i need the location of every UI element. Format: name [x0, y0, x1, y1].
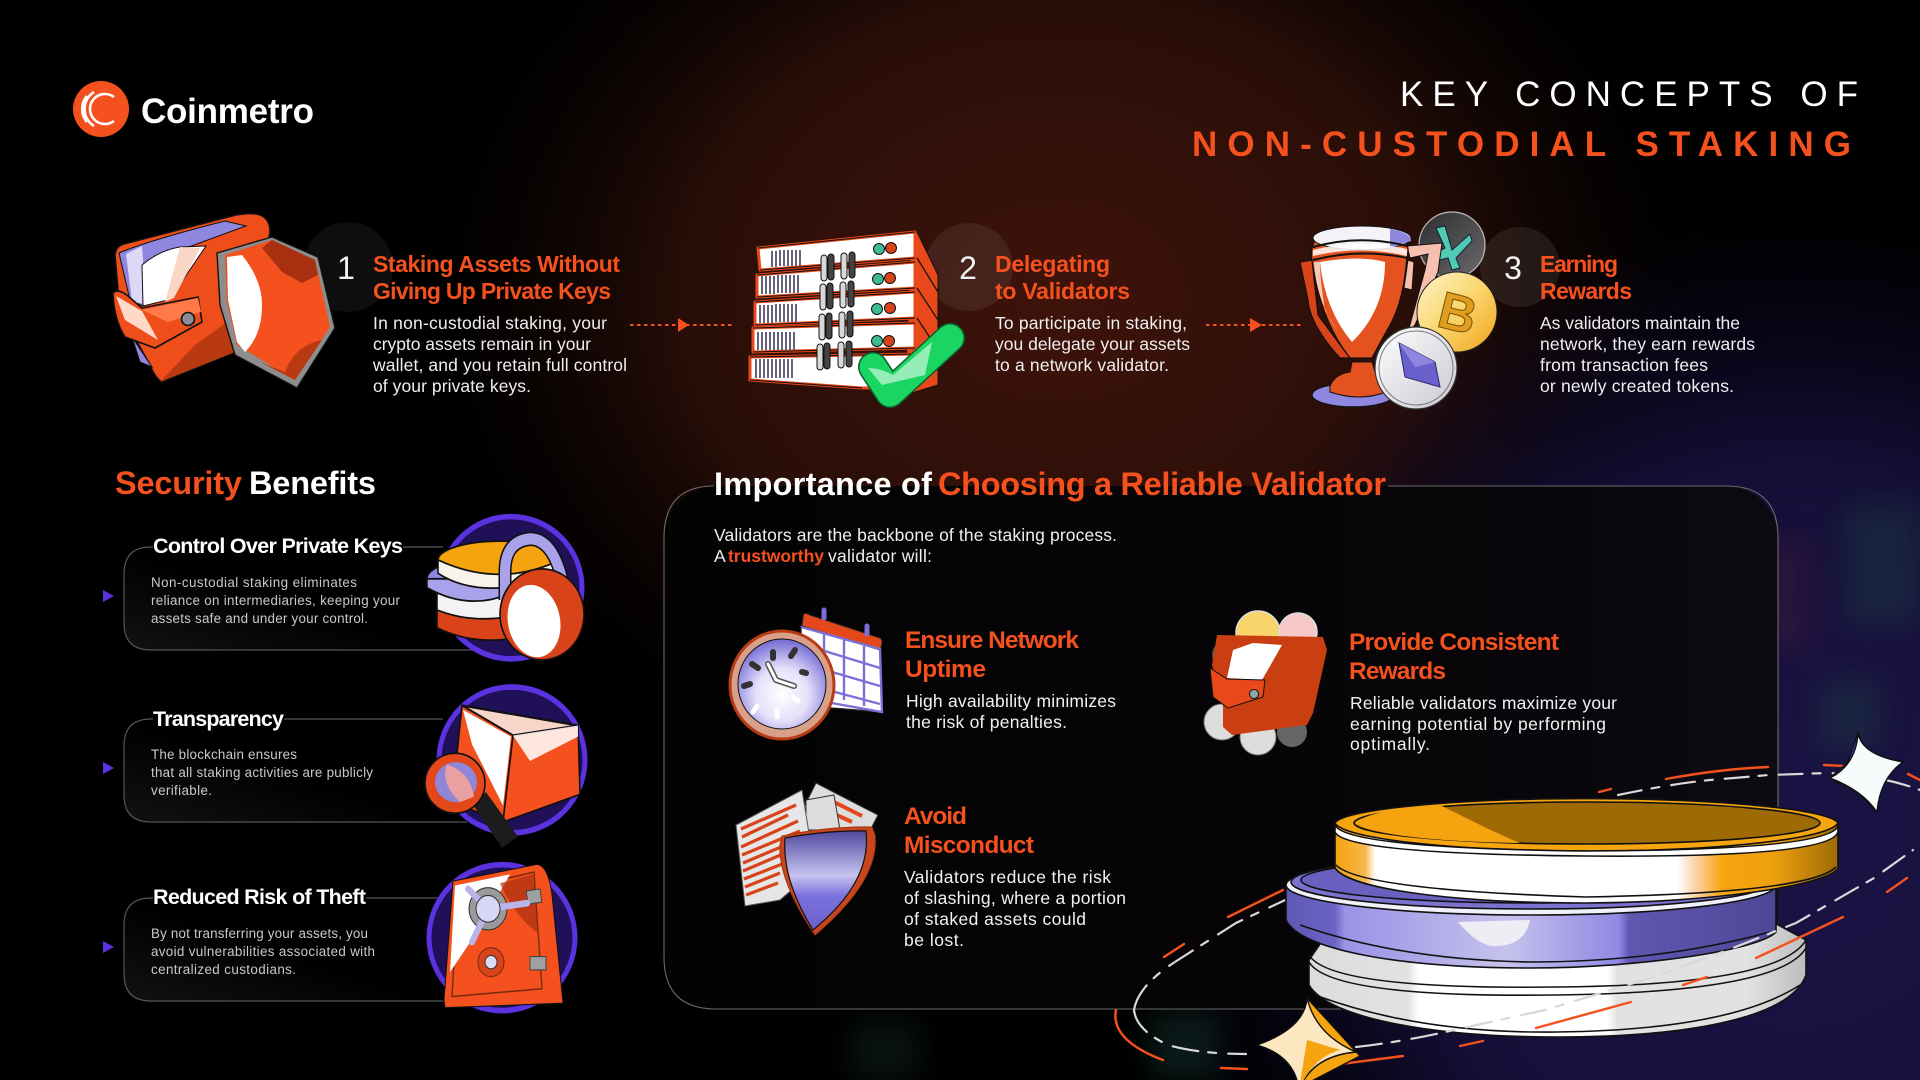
card title: Control Over Private Keys [153, 534, 403, 558]
card: Control Over Private Keys [103, 517, 584, 664]
bullet arrow [103, 762, 114, 774]
step 3 text: As validators maintain the [1540, 313, 1740, 333]
icon: logo mark [73, 81, 129, 137]
number badge 2: 2 [959, 250, 977, 286]
item heading: Ensure Network [905, 627, 1079, 654]
step 3 heading: Rewards [1540, 278, 1632, 304]
step 2 text: you delegate your assets [995, 334, 1190, 354]
heading: Security Benefits [115, 465, 376, 501]
panel intro text: validator will: [828, 546, 932, 566]
step 1 heading [373, 251, 620, 304]
item: Avoid Misconduct [736, 783, 1126, 950]
illustration: coin stack with orbit [1115, 733, 1920, 1080]
card body text [151, 575, 401, 626]
number badge 3 [1480, 227, 1560, 307]
card body text [151, 747, 373, 798]
item text: of slashing, where a portion [904, 888, 1126, 908]
item heading [905, 627, 1079, 683]
step 2 heading [995, 251, 1130, 304]
step 1 [113, 214, 627, 396]
step 1 text [372, 313, 627, 396]
step 3 text: or newly created tokens. [1540, 376, 1734, 396]
card body text: reliance on intermediaries, keeping your [151, 593, 401, 608]
step 3 [1300, 212, 1755, 409]
card body text: that all staking activities are publicly [151, 765, 373, 780]
item text: of staked assets could [904, 909, 1086, 929]
card body text: Non-custodial staking eliminates [151, 575, 357, 590]
item text: be lost. [904, 930, 964, 950]
step 1 text: wallet, and you retain full control [372, 355, 627, 375]
card body text: verifiable. [151, 783, 212, 798]
panel intro text: A [714, 546, 726, 566]
item text [904, 867, 1126, 950]
panel intro text: trustworthy [728, 546, 824, 566]
step 2 heading: Delegating [995, 251, 1110, 277]
item: Ensure Network Uptime [730, 610, 1116, 739]
item text: earning potential by performing [1350, 714, 1606, 734]
step 1 heading: Staking Assets Without [373, 251, 620, 277]
star: white [1830, 733, 1903, 812]
icon: wallet with shield [113, 214, 335, 388]
heading: Security Benefits: Benefits [249, 465, 376, 501]
panel heading [714, 466, 1386, 502]
card body text: centralized custodians. [151, 962, 296, 977]
step 3 heading: Earning [1540, 251, 1618, 277]
icon: trophy with coins: B [1432, 281, 1483, 347]
bullet arrow [103, 590, 114, 602]
panel: importance of a reliable validator [664, 466, 1778, 1009]
title: KEY CONCEPTS OF [1400, 75, 1858, 114]
item heading: Rewards [1349, 658, 1446, 685]
item heading: Avoid [904, 803, 967, 830]
card: Reduced Risk of Theft [103, 864, 575, 1011]
step 1 text: In non-custodial staking, your [373, 313, 607, 333]
item text: optimally. [1350, 734, 1430, 754]
icon: wallet with coins [1204, 611, 1327, 755]
logo wordmark: Coinmetro [141, 92, 314, 131]
icon: coins with padlock [427, 517, 584, 664]
icon: clock and calendar [730, 610, 882, 739]
bullet arrow [103, 941, 114, 953]
step 1 text: crypto assets remain in your [373, 334, 591, 354]
panel heading: Importance of [714, 466, 932, 502]
star: gold [1257, 998, 1360, 1080]
orbit front [1115, 850, 1913, 1069]
step 2 text [995, 313, 1190, 375]
item heading [1349, 629, 1559, 685]
number badge 1: 1 [337, 250, 355, 286]
panel intro text [714, 525, 1117, 566]
item heading: Provide Consistent [1349, 629, 1559, 656]
icon: documents and shield [736, 783, 878, 935]
card title: Reduced Risk of Theft [153, 885, 366, 909]
item text: Validators reduce the risk [904, 867, 1111, 887]
item heading: Misconduct [904, 832, 1034, 859]
orbit back [1134, 765, 1920, 1010]
panel heading: Choosing a Reliable Validator [938, 466, 1386, 502]
number badge 1 [303, 222, 393, 312]
arrow: step 1 to 2 [630, 318, 734, 332]
heading: Security Benefits: Security [115, 465, 242, 501]
card: Transparency [103, 687, 585, 848]
step 2 heading: to Validators [995, 278, 1130, 304]
logo: Coinmetro [73, 81, 314, 137]
card body text: The blockchain ensures [151, 747, 297, 762]
coin: white [1309, 915, 1806, 1037]
arrow: step 2 to 3 [1206, 318, 1301, 332]
card body text [151, 926, 375, 977]
item text [1350, 693, 1617, 754]
item text: the risk of penalties. [906, 712, 1067, 732]
step 3 text: network, they earn rewards [1540, 334, 1755, 354]
step 1 heading: Giving Up Private Keys [373, 278, 611, 304]
number badge 3: 3 [1504, 250, 1522, 286]
card body text: assets safe and under your control. [151, 611, 368, 626]
icon: cube with magnifier [425, 687, 585, 848]
step 3 text: from transaction fees [1540, 355, 1708, 375]
panel intro text: Validators are the backbone of the staking process. [714, 525, 1117, 545]
icon: safe [429, 864, 575, 1011]
step 1 text: of your private keys. [373, 376, 531, 396]
step 3 heading [1540, 251, 1632, 304]
coin: purple [1286, 855, 1776, 968]
step 3 text [1540, 313, 1755, 396]
card body text: By not transferring your assets, you [151, 926, 368, 941]
step 2 [750, 223, 1190, 395]
coin: gold [1335, 799, 1838, 903]
number badge 2 [925, 223, 1013, 311]
step 2 text: To participate in staking, [995, 313, 1187, 333]
item heading: Uptime [905, 656, 986, 683]
card body text: avoid vulnerabilities associated with [151, 944, 375, 959]
icon: trophy with coins [1300, 212, 1497, 409]
item text: Reliable validators maximize your [1350, 693, 1617, 713]
icon: server with check mark [750, 232, 950, 395]
item text: High availability minimizes [906, 691, 1116, 711]
item text [906, 691, 1116, 732]
item: Provide Consistent Rewards [1204, 611, 1617, 755]
step 2 text: to a network validator. [995, 355, 1169, 375]
title: NON-CUSTODIAL STAKING [1192, 125, 1851, 164]
title [1192, 75, 1858, 164]
card title: Transparency [153, 707, 284, 731]
item heading [904, 803, 1034, 859]
